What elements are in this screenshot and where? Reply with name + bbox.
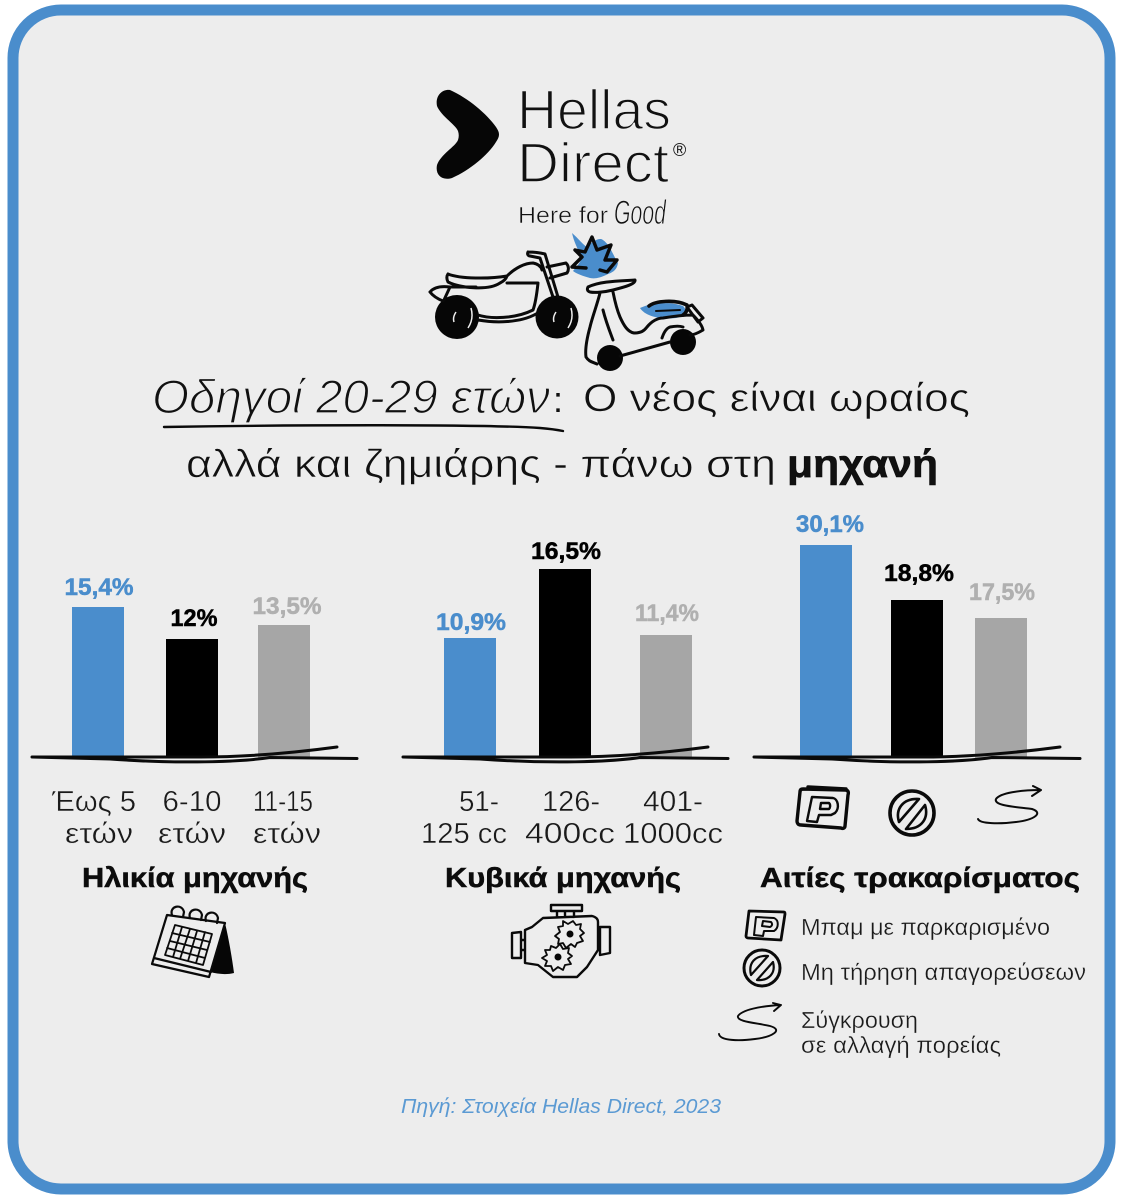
title line 2: αλλά και ζημιάρης - πάνω στη bbox=[186, 443, 776, 486]
bar: parked car bbox=[800, 545, 852, 758]
icon: prohibition bbox=[890, 791, 934, 835]
title bold word: μηχανή bbox=[787, 443, 938, 486]
bar: ignoring prohibitions bbox=[891, 600, 943, 758]
text: Μη τήρηση απαγορεύσεων bbox=[801, 959, 1086, 985]
logo: Hellas Direct: Direct bbox=[517, 131, 669, 194]
label: 401- bbox=[643, 786, 703, 818]
value: 10,9% bbox=[436, 609, 506, 636]
label: Έως 5 bbox=[51, 786, 136, 818]
label: 1000cc bbox=[623, 818, 723, 850]
value: 30,1% bbox=[796, 511, 864, 538]
label: 126- bbox=[542, 786, 600, 818]
registered mark: ® bbox=[673, 140, 686, 160]
value: 12% bbox=[170, 605, 218, 632]
logo: Hellas Direct bbox=[437, 78, 686, 232]
icon: parking bbox=[797, 787, 848, 828]
colon: : bbox=[553, 379, 563, 420]
logo: Hellas Direct: Good bbox=[614, 194, 667, 232]
icon: boomerang chevron bbox=[437, 90, 499, 179]
title underline bbox=[164, 425, 563, 431]
bar: 126-400cc bbox=[539, 569, 591, 758]
label: 6-10 bbox=[162, 786, 222, 818]
icon: engine with gears bbox=[512, 905, 610, 977]
axis stroke bbox=[403, 747, 728, 762]
icon: blue flame bbox=[572, 233, 618, 278]
bar chart: crash causes bbox=[754, 511, 1080, 893]
value: 13,5% bbox=[252, 593, 322, 620]
label: ετών bbox=[158, 818, 226, 850]
chart heading: Κυβικά μηχανής bbox=[445, 862, 681, 893]
icon: parking bbox=[746, 911, 785, 940]
bar: 11-15 years bbox=[258, 625, 310, 758]
value: 18,8% bbox=[884, 560, 954, 587]
handwritten title part: Οδηγοί 20-29 ετών bbox=[152, 370, 550, 423]
bar: 401-1000cc bbox=[640, 635, 692, 758]
bar: 51-125 cc bbox=[444, 638, 496, 758]
bar: lane change bbox=[975, 618, 1027, 758]
icon: prohibition bbox=[744, 950, 780, 986]
value: 15,4% bbox=[64, 574, 134, 601]
label: 400cc bbox=[525, 818, 615, 850]
bar: 6-10 years bbox=[166, 639, 218, 758]
icon: swerve arrow bbox=[978, 786, 1041, 823]
illustration: motorcycle and scooter crash bbox=[430, 233, 703, 371]
wordmark: Hellas bbox=[517, 78, 671, 141]
label: 125 cc bbox=[421, 818, 507, 850]
bar: up to 5 years bbox=[72, 607, 124, 758]
bar chart: motorcycle age bbox=[32, 574, 357, 893]
label: 11-15 bbox=[253, 786, 313, 818]
label: 51- bbox=[459, 786, 499, 818]
icon: motorcycle bbox=[430, 252, 578, 339]
value: 16,5% bbox=[531, 538, 601, 565]
axis stroke bbox=[754, 747, 1080, 762]
label: ετών bbox=[65, 818, 133, 850]
tagline: Here for bbox=[518, 202, 608, 228]
legend: crash causes bbox=[719, 911, 1086, 1058]
icon: scooter bbox=[586, 280, 703, 371]
label: ετών bbox=[253, 818, 321, 850]
title bbox=[152, 370, 970, 486]
axis stroke bbox=[32, 747, 357, 762]
chart heading: Αιτίες τρακαρίσματος bbox=[760, 862, 1080, 893]
value: 17,5% bbox=[969, 579, 1035, 606]
text: Μπαμ με παρκαρισμένο bbox=[801, 914, 1050, 940]
value: 11,4% bbox=[635, 600, 699, 627]
icon: calendar bbox=[152, 907, 234, 977]
icon: swerve arrow bbox=[719, 1003, 781, 1040]
text: σε αλλαγή πορείας bbox=[801, 1032, 1001, 1058]
title line 1: Ο νέος είναι ωραίος bbox=[583, 377, 970, 420]
text: Σύγκρουση bbox=[801, 1007, 918, 1033]
chart heading: Ηλικία μηχανής bbox=[82, 862, 308, 893]
bar chart: engine cc bbox=[403, 538, 728, 893]
source note: Πηγή: Στοιχεία Hellas Direct, 2023 bbox=[401, 1096, 721, 1118]
